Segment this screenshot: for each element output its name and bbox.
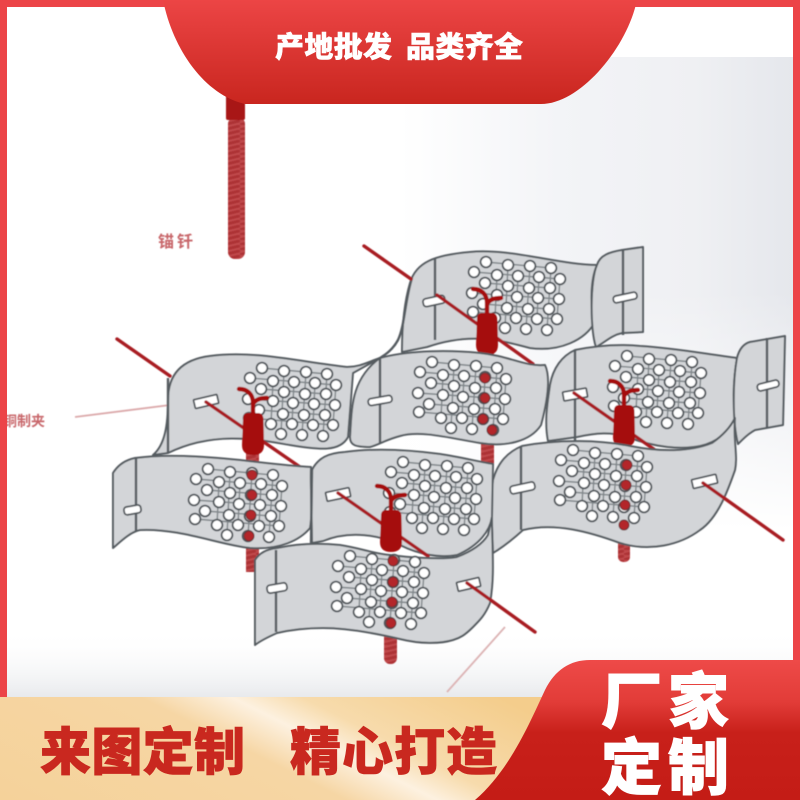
lower rod below front cell: [384, 620, 397, 664]
panel: front left cell: [113, 456, 311, 548]
geocell diagram: [3, 95, 785, 692]
red rod seen through holes: [386, 556, 398, 628]
rod and clip: front middle cell: [338, 486, 428, 556]
slogan: custom by drawing: 来图定制: [40, 724, 245, 781]
red rod seen through holes: [478, 373, 497, 435]
panel: front bottom cell: [255, 517, 535, 645]
label: anchor rod: 锚钎: [158, 233, 193, 251]
panel: back left cell: [153, 354, 380, 455]
label: clip: 铜制夹: [3, 413, 45, 429]
banner text: 品类齐全: [406, 30, 523, 64]
panel: back right cell: [546, 336, 785, 448]
rod and clip: back top cell: [364, 246, 533, 465]
banner text: 产地批发: [275, 30, 392, 64]
leader line: clip: [75, 403, 186, 417]
top banner: [163, 0, 637, 104]
leader line: lower right: [447, 627, 505, 692]
red rod seen through holes: [619, 460, 632, 530]
rod and clip: back right cell: [574, 381, 655, 562]
red rod seen through holes: [244, 470, 257, 541]
panel: back top cell: [360, 247, 643, 366]
red corner badge: [475, 660, 800, 800]
slogan: fine craft: 精心打造: [290, 724, 497, 781]
anchor: right cell: [703, 483, 783, 540]
bottom band: [0, 697, 600, 800]
panel: front middle cell: [311, 450, 493, 556]
badge text: custom: 定制: [601, 734, 729, 800]
panel: back middle cell: [350, 351, 548, 447]
rod and clip: back left cell: [117, 339, 300, 572]
anchor rod: [226, 95, 245, 259]
panel: front right cell: [491, 418, 783, 553]
anchor: bottom cell: [467, 583, 535, 632]
badge text: factory: 厂家: [601, 668, 729, 736]
